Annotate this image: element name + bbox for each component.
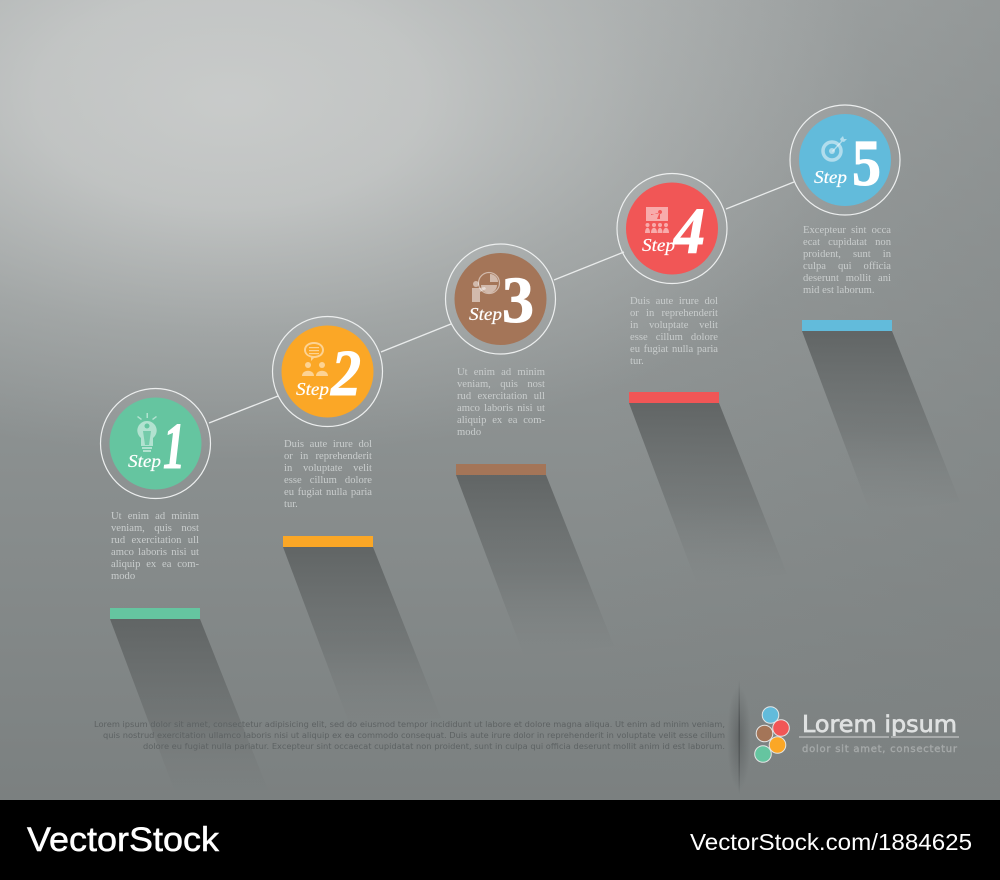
- text block: step 4: Duis aute irure dol: [630, 296, 718, 307]
- text block: step 1: rud exercitation ull: [111, 535, 199, 546]
- text block: step 1: modo: [111, 571, 135, 582]
- footer paragraph: quis nostrud exercitation ullamco laboris nisi ut aliquip ex ea commodo consequat. Duis aute irure dolor in reprehenderit in voluptate velit esse cillum: [103, 731, 725, 740]
- text block: step 2: Duis aute irure dol: [284, 439, 372, 450]
- step label: Step: [469, 304, 502, 324]
- text block: step 3: amco laboris nisi ut: [457, 403, 545, 414]
- watermark bar: VectorStock.com/1884625: [690, 829, 972, 855]
- logo mark: [755, 707, 789, 762]
- text block: step 4: eu fugiat nulla paria: [630, 344, 718, 355]
- vertical divider shadow: [727, 680, 751, 795]
- text block: step 1: veniam, quis nost: [111, 523, 199, 534]
- text block: step 2: esse cillum dolore: [284, 475, 372, 486]
- text block: step 3: veniam, quis nost: [457, 379, 545, 390]
- icon: target with arrow: [823, 136, 847, 160]
- text block: step 2: eu fugiat nulla paria: [284, 487, 372, 498]
- footer paragraph: Lorem ipsum dolor sit amet, consectetur adipisicing elit, sed do eiusmod tempor incididunt ut labore et dolore magna aliqua. Ut enim ad minim veniam,: [94, 720, 725, 729]
- icon: light bulb: [137, 413, 157, 452]
- icon: people with speech bubble: [302, 342, 328, 376]
- footer paragraph: [94, 720, 725, 751]
- step number: 1: [163, 410, 185, 483]
- step number: 4: [672, 195, 705, 268]
- text block: step 4: esse cillum dolore: [630, 332, 718, 343]
- step number: 2: [330, 337, 361, 410]
- step 3 badge: [446, 244, 556, 354]
- text block: step 1: [111, 511, 199, 582]
- logo text: dolor sit amet, consectetur: [802, 744, 958, 755]
- watermark bar: [0, 800, 1000, 880]
- text block: step 5: Excepteur sint occa: [803, 225, 891, 236]
- step number: 5: [852, 127, 881, 200]
- step bars: [110, 320, 892, 619]
- text block: step 5: [803, 225, 891, 296]
- watermark bar: VectorStock: [27, 821, 220, 859]
- footer paragraph: dolore eu fugiat nulla pariatur. Excepteur sint occaecat cupidatat non proident, sunt in culpa qui officia deserunt mollit anim id est laborum.: [143, 742, 725, 751]
- connector lines between steps: [209, 182, 794, 423]
- text block: step 3: [457, 367, 545, 438]
- text block: step 5: deserunt mollit ani: [803, 273, 891, 284]
- icon: presenter with pie chart: [472, 272, 500, 302]
- text block: step 2: or in reprehenderit: [284, 451, 372, 462]
- text block: step 3: modo: [457, 427, 481, 438]
- logo text: Lorem ipsum: [802, 712, 957, 738]
- step label: Step: [814, 167, 847, 187]
- text block: step 1: aliquip ex ea com-: [111, 559, 199, 570]
- step label: Step: [296, 379, 329, 399]
- step label: Step: [642, 235, 675, 255]
- text block: step 3: aliquip ex ea com-: [457, 415, 545, 426]
- long shadows under the step bars: [110, 331, 960, 800]
- text block: step 2: tur.: [284, 499, 298, 510]
- text block: step 4: tur.: [630, 356, 644, 367]
- text block: step 3: rud exercitation ull: [457, 391, 545, 402]
- icon: classroom presentation: [645, 207, 669, 233]
- text block: step 1: Ut enim ad minim: [111, 511, 199, 522]
- step number: 3: [502, 264, 534, 337]
- step 5 badge: [790, 105, 900, 215]
- text block: step 4: [630, 296, 718, 367]
- text block: step 3: Ut enim ad minim: [457, 367, 545, 378]
- text block: step 4: in voluptate velit: [630, 320, 718, 331]
- text block: step 4: or in reprehenderit: [630, 308, 718, 319]
- step 2 badge: [272, 316, 382, 426]
- text block: step 1: amco laboris nisi ut: [111, 547, 199, 558]
- text block: step 2: [284, 439, 372, 510]
- step 1 badge: [100, 388, 210, 498]
- step label: Step: [128, 451, 161, 471]
- text block: step 5: culpa qui officia: [803, 261, 891, 272]
- text block: step 5: ecat cupidatat non: [803, 237, 891, 248]
- logo text: [799, 712, 959, 755]
- step 4 badge: [617, 174, 727, 284]
- text block: step 5: proident, sunt in: [803, 249, 891, 260]
- text block: step 5: mid est laborum.: [803, 285, 874, 296]
- text block: step 2: in voluptate velit: [284, 463, 372, 474]
